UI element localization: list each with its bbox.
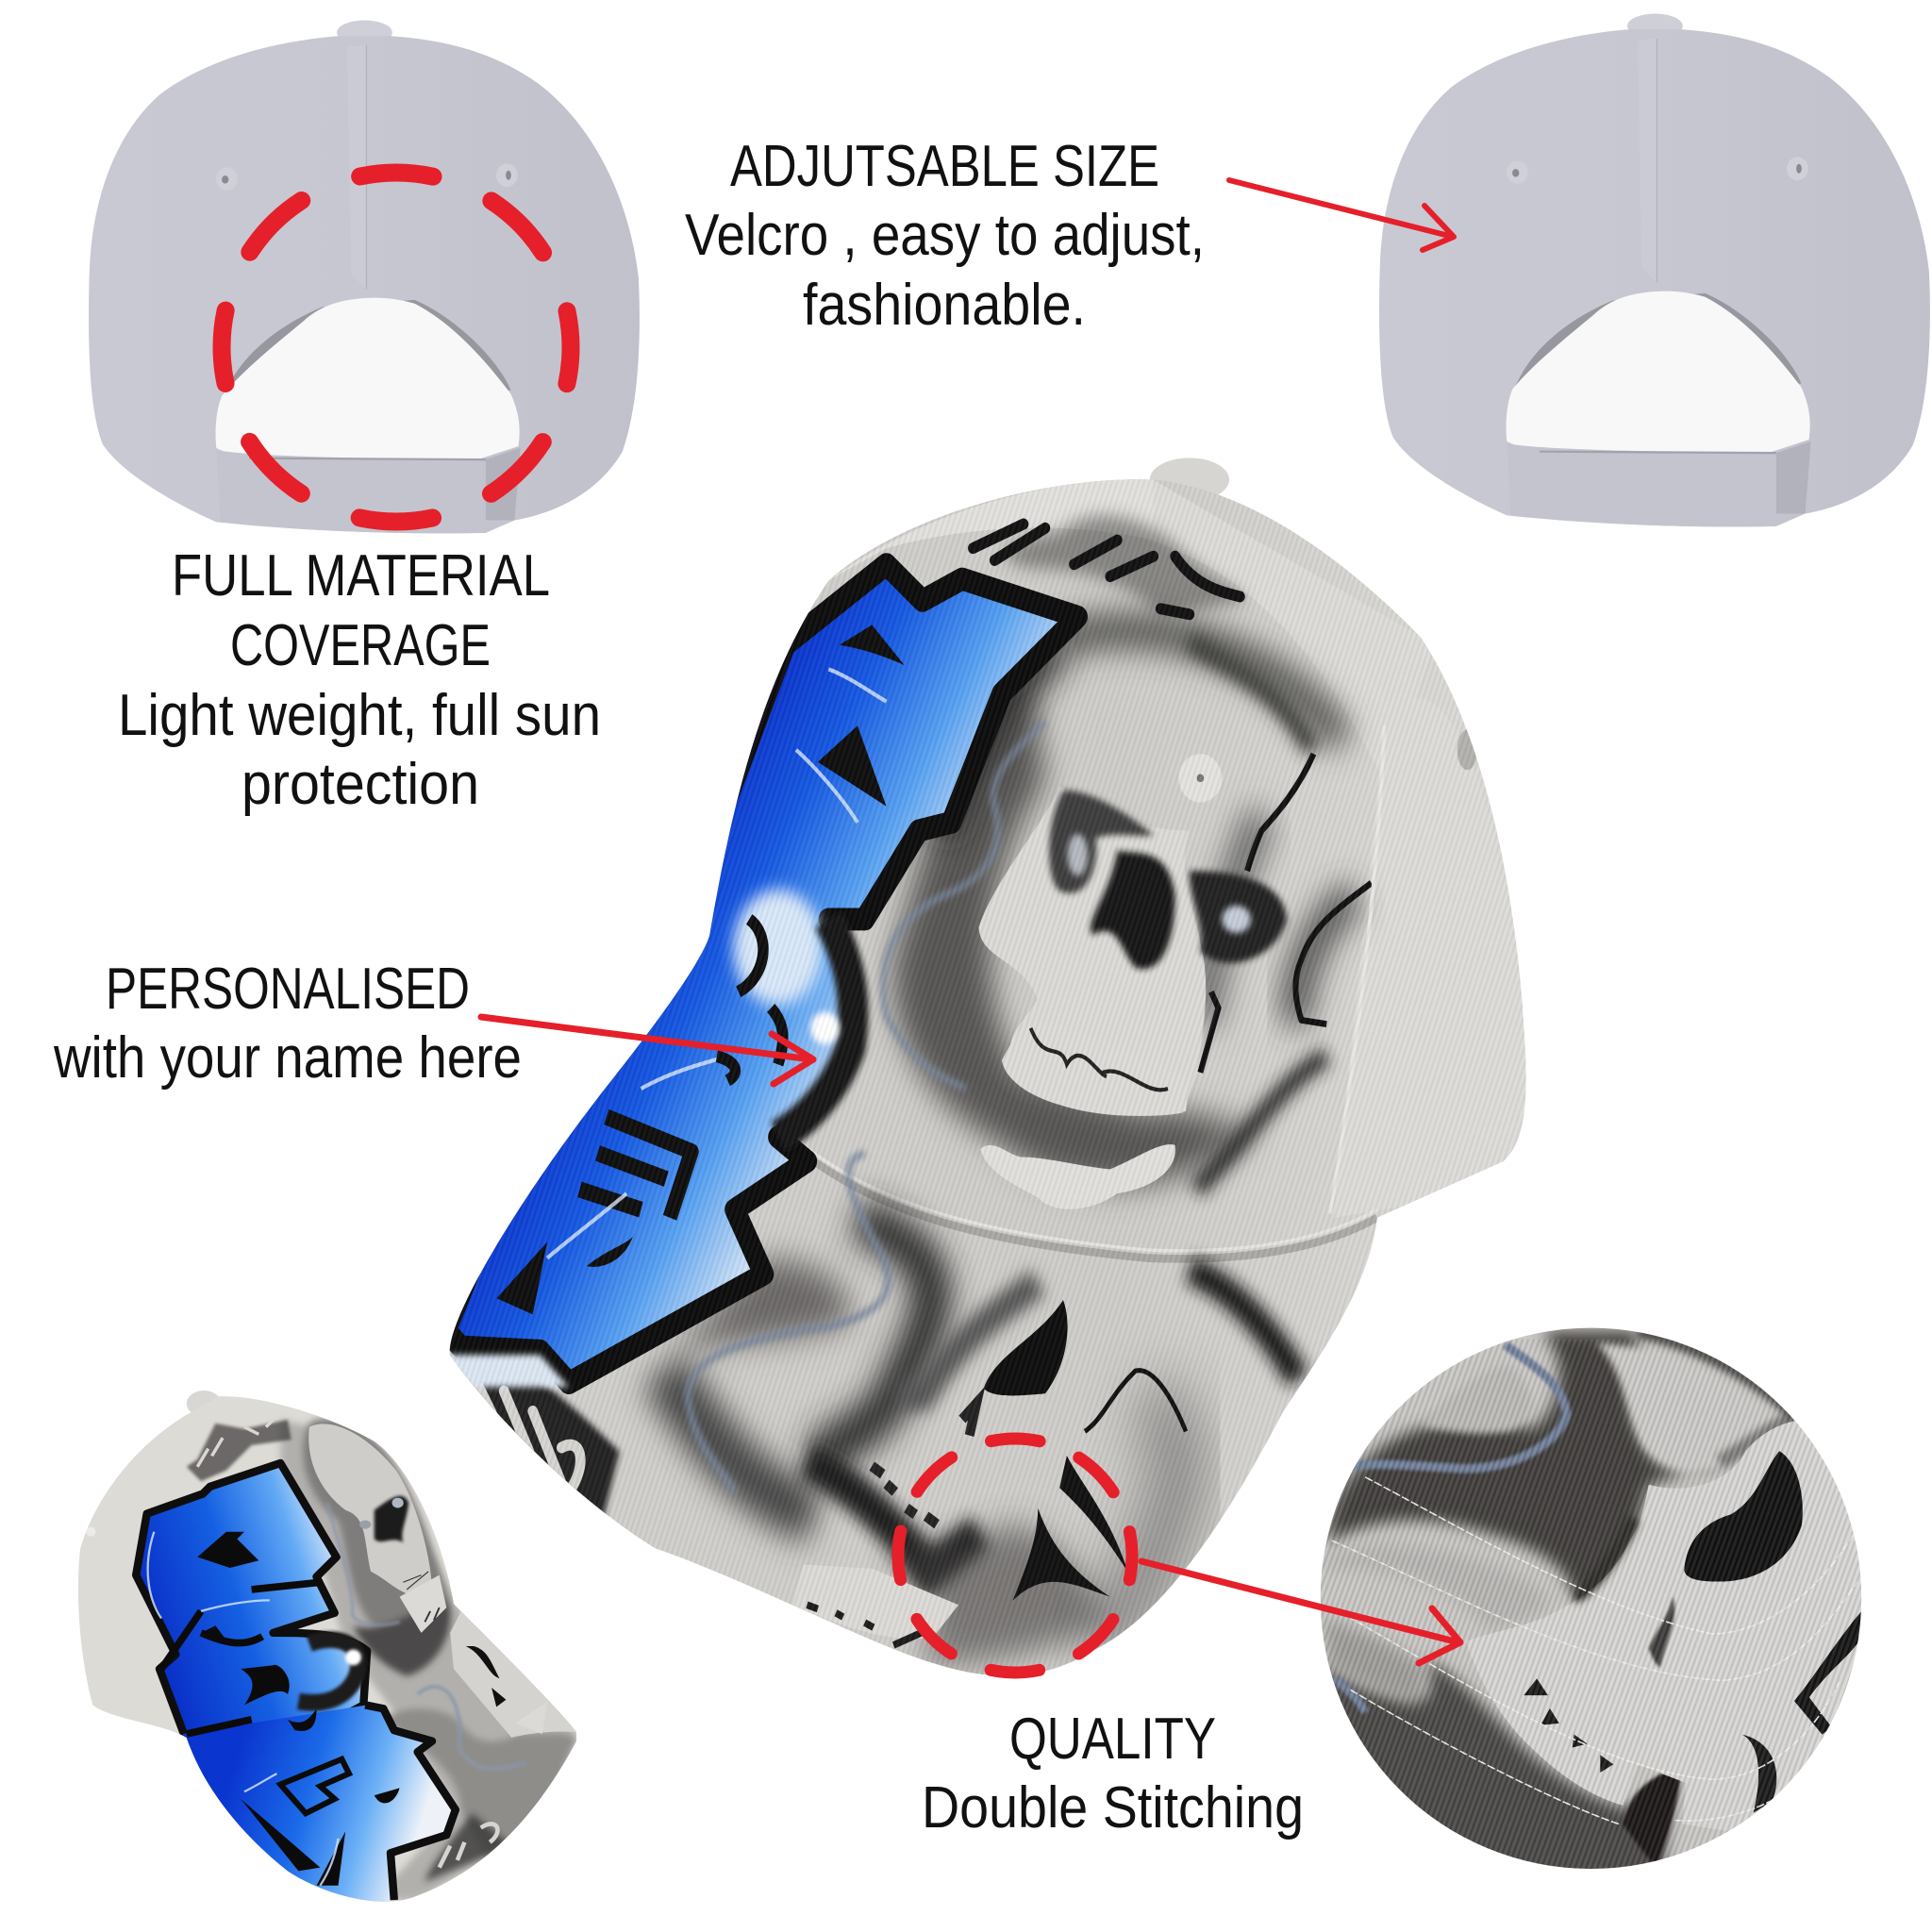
text block: quality: Double Stitching — [922, 1775, 1304, 1840]
text block: adjustable size — [685, 134, 1205, 338]
close-up skull face — [1466, 1420, 1869, 1831]
icon: red dashed circle on stitching — [898, 1439, 1132, 1673]
text block: full material coverage: FULL MATERIAL — [172, 543, 550, 608]
arrow: quality to close-up — [1141, 1561, 1460, 1663]
icon: red dashed circle on back cap — [222, 173, 571, 522]
skull lower teeth — [980, 1144, 1175, 1209]
thumbnail blue lettering lower — [183, 1706, 451, 1902]
close-up blue wisp — [1352, 1344, 1567, 1469]
text block: quality — [922, 1707, 1304, 1840]
text block: quality: QUALITY — [1009, 1707, 1216, 1772]
text block: full material coverage: Light weight, full sun — [118, 683, 601, 748]
close-up artwork — [1302, 1321, 1884, 1899]
skull cracks — [1200, 754, 1372, 1073]
skull face — [979, 786, 1206, 1116]
thumbnail button — [187, 1391, 222, 1417]
text block: full material coverage — [118, 543, 601, 817]
graffiti blue lettering — [446, 564, 1077, 1383]
brim lower teeth — [792, 1564, 958, 1639]
text block: full material coverage: protection — [242, 752, 479, 817]
close-up stitching — [1332, 1477, 1857, 1824]
main airbrushed cap — [425, 443, 1579, 1702]
arrow: personalised to cap — [481, 1017, 813, 1084]
brim seam — [815, 1158, 1377, 1263]
close-up black cracks — [1794, 1611, 1861, 1735]
close-up teeth dots — [1524, 1678, 1613, 1773]
thumbnail blue lettering upper — [136, 1463, 367, 1741]
cap crown button — [1150, 458, 1229, 502]
close-up dark smoke — [1328, 1332, 1727, 1600]
skull upper teeth — [1002, 1045, 1187, 1116]
brim skull eye — [984, 1300, 1068, 1395]
side vent eyelet — [1457, 730, 1477, 770]
text block: personalised — [53, 957, 522, 1091]
smoke wisps — [883, 722, 1045, 1089]
close-up nose — [1649, 1596, 1674, 1667]
stitching close-up circle — [1302, 1321, 1884, 1899]
centre vent eyelet — [1178, 754, 1222, 802]
cap body artwork — [449, 479, 1526, 1675]
text block: adjustable size: fashionable. — [803, 273, 1086, 338]
thumbnail side vent — [86, 1527, 95, 1537]
back cap image left — [89, 20, 640, 533]
back cap image right — [1379, 13, 1930, 526]
text block: personalised: with your name here — [53, 1025, 522, 1091]
brim smoke — [670, 1258, 851, 1355]
text block: adjustable size: Velcro , easy to adjust, — [685, 203, 1205, 268]
thumbnail black inner details — [197, 1532, 400, 1886]
text block: adjustable size: ADJUTSABLE SIZE — [730, 134, 1159, 199]
graffiti black inner details — [496, 625, 905, 1314]
text block: personalised: PERSONALISED — [106, 957, 470, 1022]
thumbnail lettering outline — [365, 1705, 456, 1900]
cap back view with full material coverage circle — [89, 20, 640, 533]
close-up eye socket — [1684, 1451, 1803, 1582]
brim skull details — [872, 1403, 976, 1524]
thumbnail cap front view — [78, 1391, 576, 1902]
thumbnail artwork — [78, 1396, 576, 1902]
text block: full material coverage: COVERAGE — [230, 613, 491, 678]
arrow: adjustable size to cap — [1229, 180, 1454, 250]
lower graffiti strips — [454, 1352, 620, 1541]
